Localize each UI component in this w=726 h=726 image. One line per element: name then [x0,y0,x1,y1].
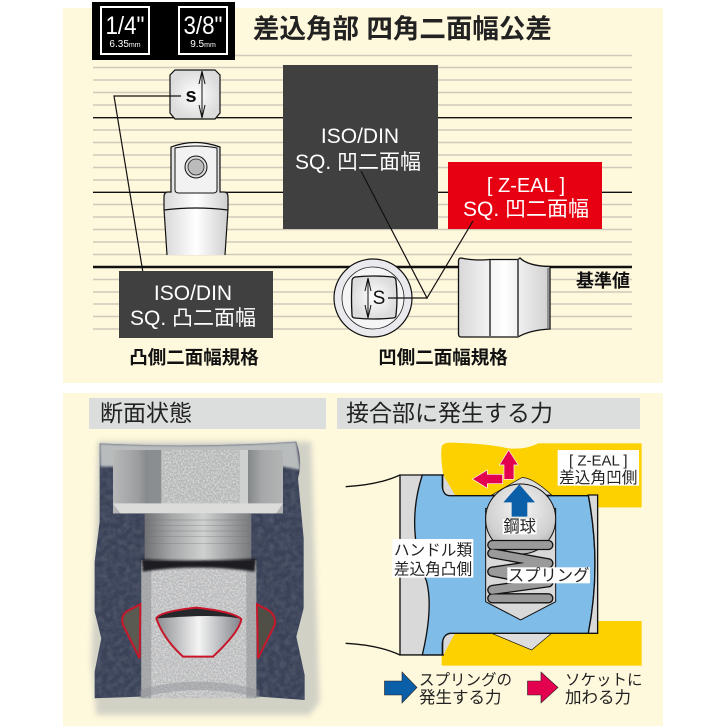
photo: socket cross section [91,442,320,715]
label box: ISO/DIN male: SQ. 凸二面幅 [130,307,256,330]
male square drive [170,70,220,119]
spring force arrow [503,484,535,517]
socket end view [334,259,412,337]
legend: spring force: スプリングの [419,671,512,689]
label: steel ball: 鋼球 [503,518,536,536]
male square drive: s [185,85,197,107]
heading: cross section [89,398,326,429]
label: handle side [392,539,473,578]
male drive blue [415,475,595,655]
label: handle side: 差込角凸側 [394,560,472,578]
size badges: 9.5mm [190,39,216,50]
legend: spring force [384,671,512,707]
leader lines: female [361,171,473,298]
label box: ISO/DIN male [119,271,273,338]
size badges: 1/4" [106,12,144,40]
male extension side view [164,142,228,255]
legend: socket force [528,671,643,707]
steel ball [486,484,556,554]
socket end view: S [373,288,385,309]
label: Z-EAL side [558,450,639,487]
female socket lower [442,621,642,666]
label: reference value: 基準値 [576,270,630,291]
label: Z-EAL side: 差込角凹側 [559,469,637,487]
recess [492,478,552,650]
label box: ISO/DIN female: ISO/DIN [321,125,399,148]
label box: Z-EAL female: [ Z-EAL ] [487,175,565,197]
handle square grey [400,475,443,655]
socket force arrow up [499,450,518,479]
legend: socket force: 加わる力 [565,688,631,707]
label box: ISO/DIN female: SQ. 凹二面幅 [295,151,421,174]
size badges [92,2,235,60]
panel: tolerance diagram [63,8,663,383]
size badges: 3/8" [184,12,222,40]
label box: ISO/DIN female [283,65,438,229]
label: female width standard: 凹側二面幅規格 [378,347,508,368]
female socket upper [441,443,642,507]
heading: joint forces: 接合部に発生する力 [346,400,553,426]
legend: socket force: ソケットに [565,671,643,689]
socket force arrow left [472,470,503,488]
label: handle side: ハンドル類 [394,542,472,560]
heading: joint forces [337,398,640,429]
handle shank outlines [346,475,400,655]
label: male width standard: 凸側二面幅規格 [129,347,259,368]
label: spring: スプリング [508,567,589,585]
spring [492,545,548,598]
leader line: male [114,96,181,285]
label box: Z-EAL female [448,162,602,229]
panel: lower background [63,393,663,726]
socket side view [458,258,550,337]
size badges: 6.35mm [109,39,141,50]
heading: cross section: 断面状態 [100,400,192,426]
bore [486,508,556,620]
label box: Z-EAL female: SQ. 凹二面幅 [463,198,589,221]
diagram: joint cross section [346,443,642,666]
title: 差込角部 四角二面幅公差 [253,14,552,44]
label box: ISO/DIN male: ISO/DIN [154,282,232,305]
label: Z-EAL side: [ Z-EAL ] [569,453,628,470]
legend: spring force: 発生する力 [419,688,502,707]
